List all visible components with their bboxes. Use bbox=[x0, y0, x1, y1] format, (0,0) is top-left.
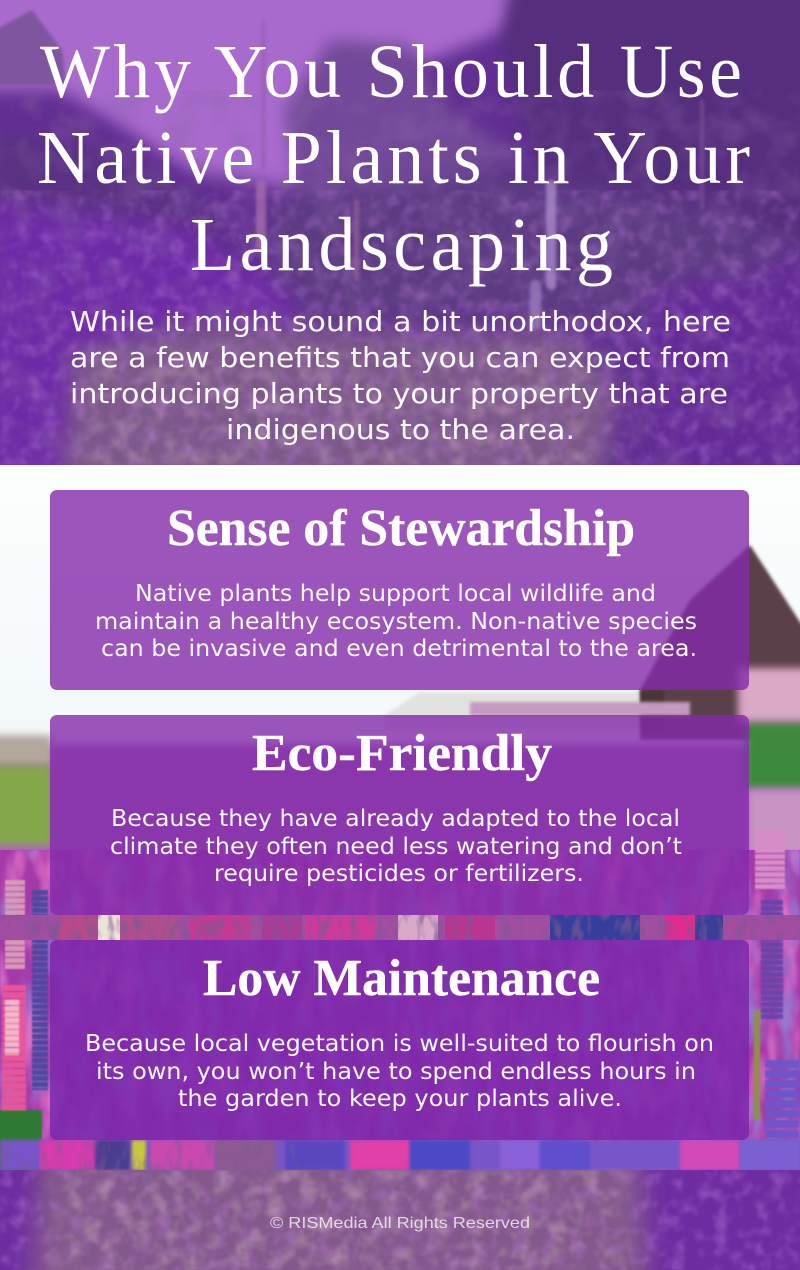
text: eco-friendly: require pesticides or fertilizers. bbox=[214, 861, 584, 887]
title: Why You Should Use bbox=[40, 30, 742, 114]
lupin spikes at the sides bbox=[12, 830, 782, 1170]
heading: low maintenance: Low Maintenance bbox=[203, 950, 600, 1007]
foxglove spires bbox=[256, 20, 704, 330]
text: sense of stewardship: maintain a healthy ecosystem. Non-native species bbox=[95, 609, 697, 635]
text: low maintenance: its own, you won’t have to spend endless hours in bbox=[96, 1059, 696, 1085]
house bbox=[640, 545, 800, 740]
heading: sense of stewardship: Sense of Stewardship bbox=[167, 500, 635, 557]
middle background photo: lupin field and house bbox=[0, 542, 800, 1170]
footer copyright: © RISMedia All Rights Reserved bbox=[270, 1215, 530, 1232]
text: sense of stewardship bbox=[95, 581, 697, 662]
text: low maintenance: the garden to keep your plants alive. bbox=[178, 1086, 622, 1112]
text: sense of stewardship: can be invasive and even detrimental to the area. bbox=[101, 636, 697, 662]
title: Landscaping bbox=[190, 203, 613, 287]
heading: eco-friendly: Eco-Friendly bbox=[252, 725, 552, 782]
text: eco-friendly: Because they have already adapted to the local bbox=[111, 806, 680, 832]
panel: sense of stewardship bbox=[50, 490, 749, 690]
footer background photo with purple overlay bbox=[0, 1170, 800, 1270]
far field bbox=[0, 745, 800, 865]
strip between cards 2 and 3 bbox=[0, 915, 800, 940]
intro text: are a few benefits that you can expect from bbox=[70, 341, 730, 374]
strip below card 3 bbox=[0, 1140, 800, 1170]
text: eco-friendly bbox=[110, 806, 682, 887]
intro text: While it might sound a bit unorthodox, here bbox=[70, 305, 731, 338]
intro text: indigenous to the area. bbox=[226, 413, 575, 446]
text: sense of stewardship: Native plants help support local wildlife and bbox=[135, 581, 656, 607]
header background photo with purple overlay bbox=[0, 0, 800, 490]
text: low maintenance: Because local vegetation is well-suited to flourish on bbox=[85, 1031, 714, 1057]
intro text bbox=[70, 305, 731, 446]
panel: eco-friendly bbox=[50, 715, 749, 915]
title: Native Plants in Your bbox=[37, 116, 750, 200]
text: eco-friendly: climate they often need less watering and don’t bbox=[110, 834, 682, 860]
panel: low maintenance bbox=[50, 940, 749, 1140]
house roof bbox=[0, 10, 66, 85]
title bbox=[37, 30, 750, 287]
text: low maintenance bbox=[85, 1031, 714, 1112]
intro text: introducing plants to your property that are bbox=[70, 377, 728, 410]
